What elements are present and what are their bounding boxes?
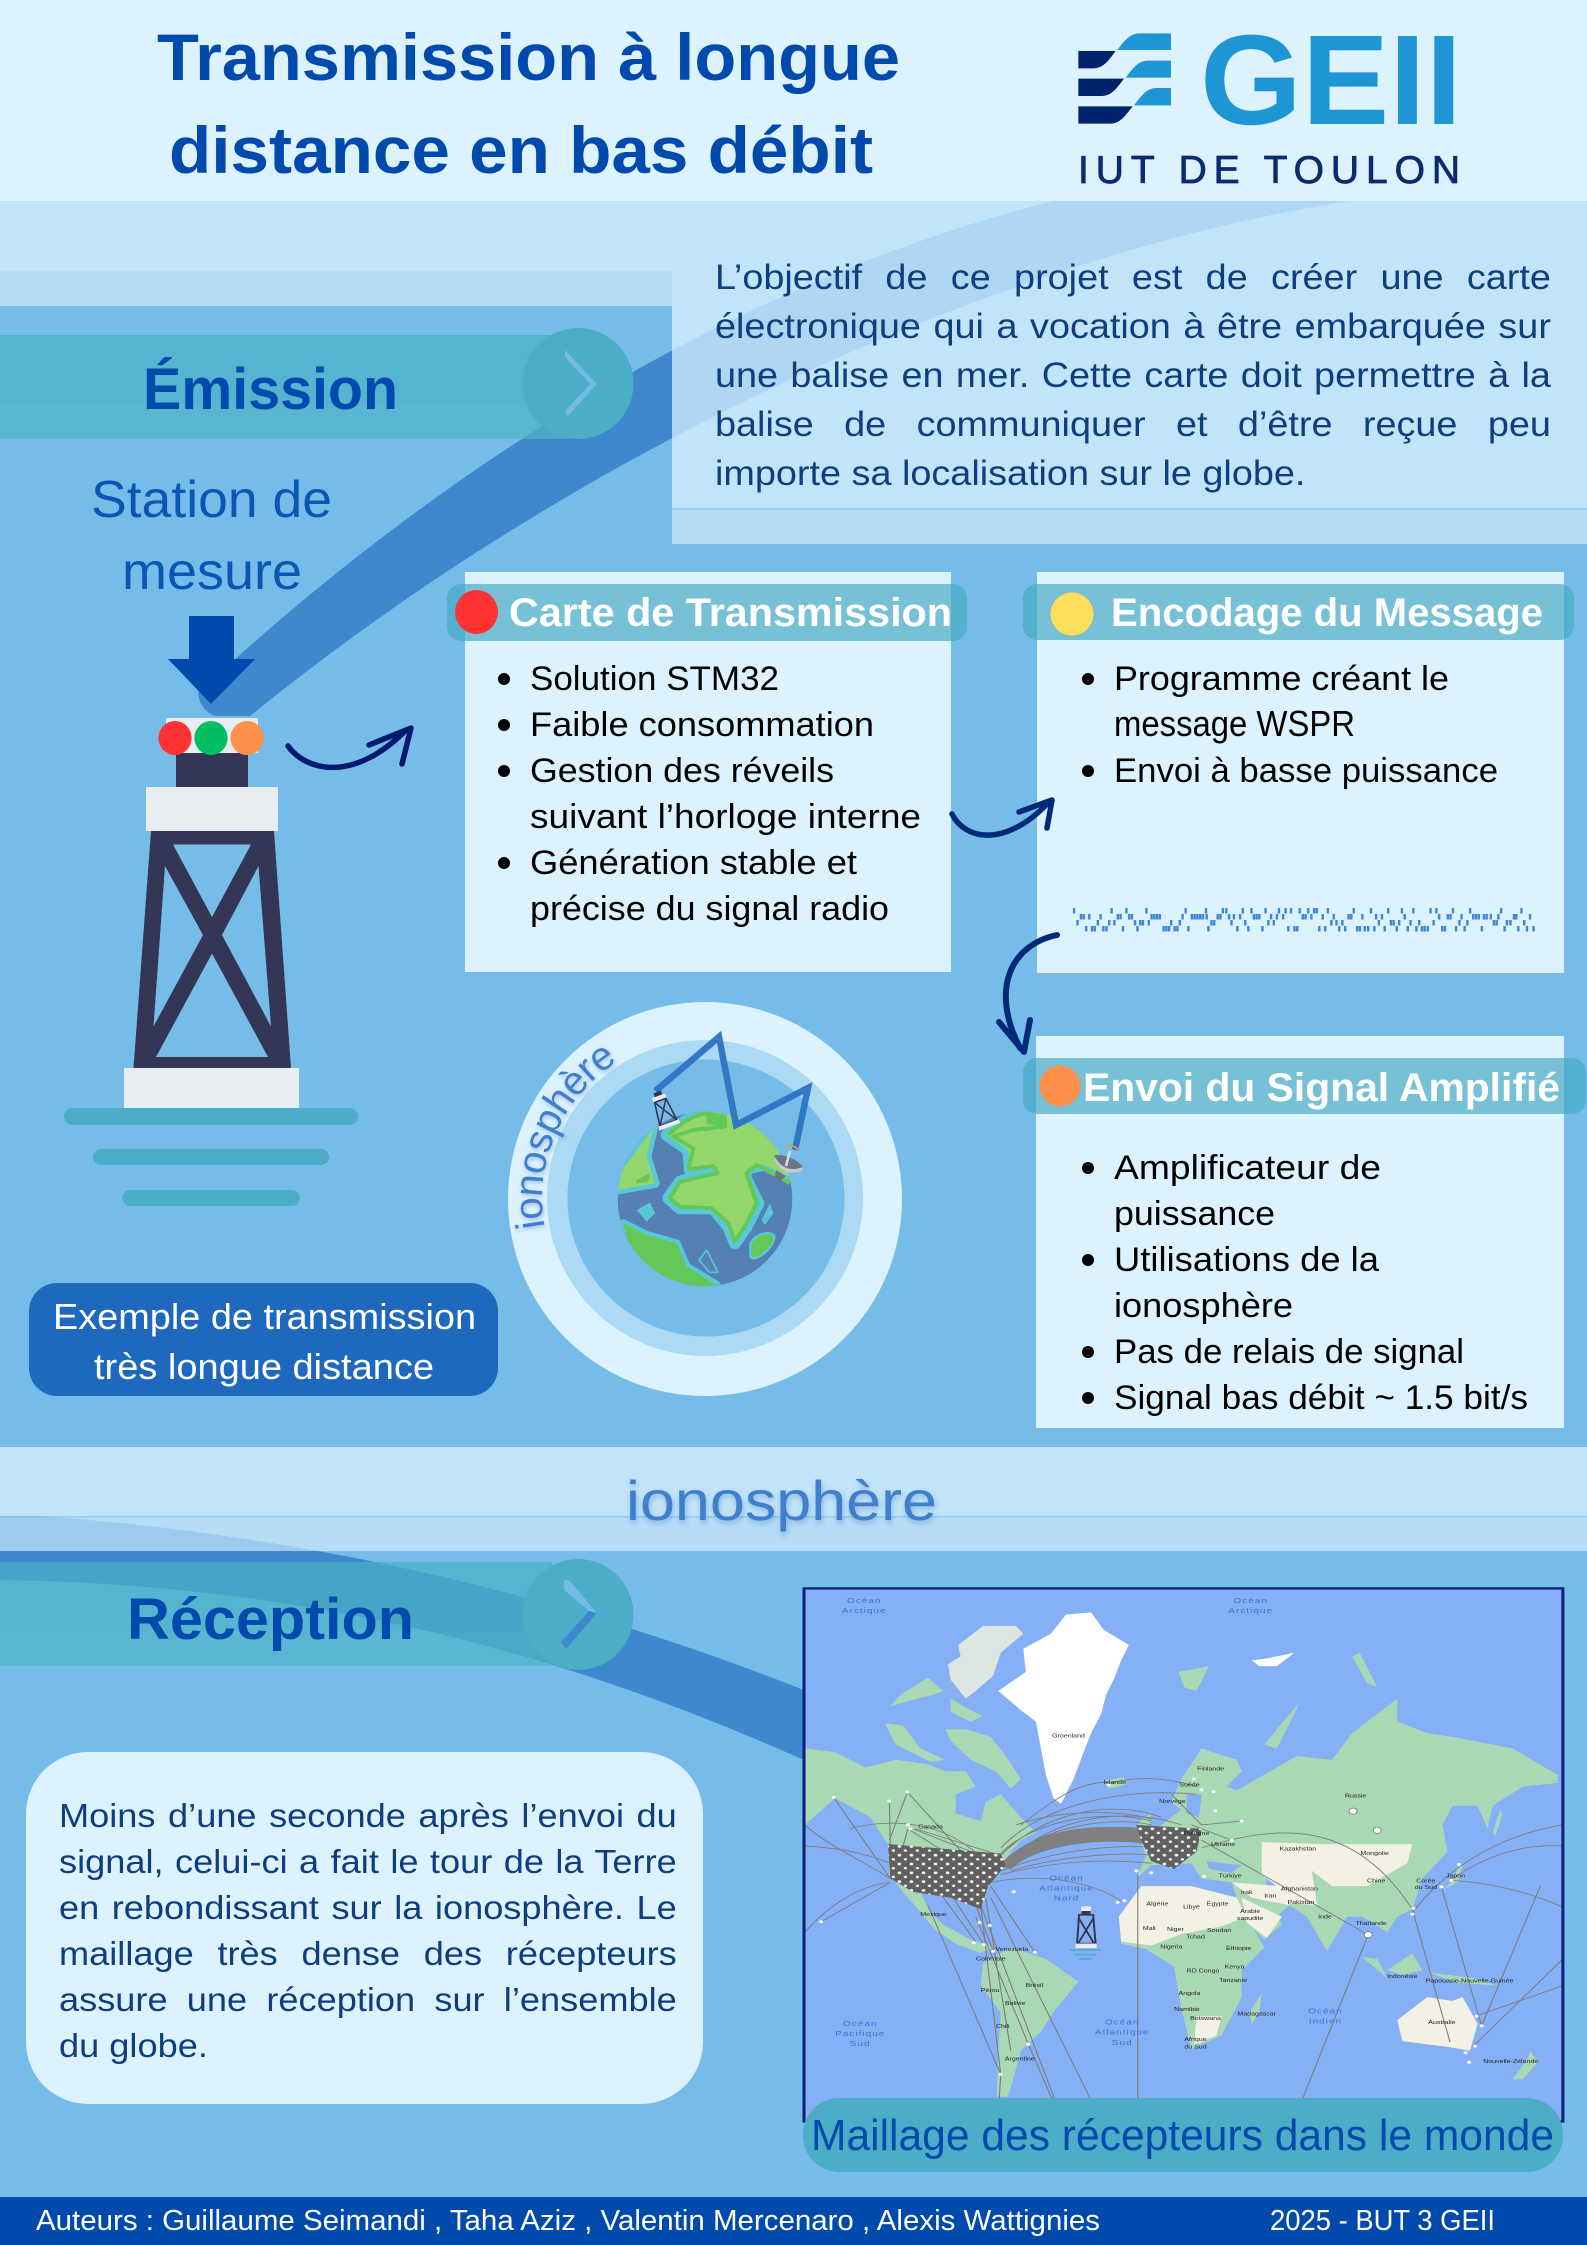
icon: mini buoy bbox=[647, 1088, 680, 1131]
map labels: Brésil bbox=[1026, 1983, 1043, 1989]
world map of receivers bbox=[803, 1588, 1563, 2172]
WSPR signal pattern bbox=[1074, 908, 1534, 932]
world map of receivers: Océan bbox=[847, 1596, 882, 1605]
map labels: Iran bbox=[1264, 1893, 1277, 1899]
bullet list: Faible consommation bbox=[530, 706, 874, 744]
title: distance en bas débit bbox=[169, 113, 873, 187]
world map of receivers: Pacifique bbox=[835, 2029, 885, 2038]
map route lines bbox=[805, 1779, 1563, 2116]
map mini buoy bbox=[1070, 1906, 1101, 1959]
map labels: Madagascar bbox=[1237, 2011, 1276, 2017]
world map of receivers: Nord bbox=[1054, 1894, 1079, 1902]
map labels: Türkiye bbox=[1219, 1873, 1242, 1879]
map ocean bbox=[804, 1588, 1563, 2122]
card header bbox=[1023, 1058, 1586, 1114]
map labels: saoudite bbox=[1237, 1916, 1264, 1922]
map labels: RD Congo bbox=[1187, 1968, 1220, 1974]
heading: ionosphère: ionosphère bbox=[626, 1469, 937, 1532]
title bbox=[157, 20, 900, 187]
map labels: Japon bbox=[1446, 1873, 1466, 1879]
bullet list: Génération stable et bbox=[530, 844, 858, 882]
card title: Envoi du Signal Amplifié bbox=[1083, 1066, 1560, 1110]
map labels: Suède bbox=[1179, 1782, 1200, 1788]
bullet list: précise du signal radio bbox=[530, 890, 889, 928]
bullet list bbox=[498, 660, 921, 928]
arrow: card two to card three bbox=[999, 935, 1057, 1052]
bullet list: Amplificateur de bbox=[1114, 1149, 1381, 1187]
map labels: Chili bbox=[996, 2024, 1010, 2030]
map labels: Thaïlande bbox=[1356, 1921, 1387, 1927]
map labels: Botswana bbox=[1190, 2016, 1222, 2022]
text block: reception explanation: en rebondissant sur la ionosphère. Le bbox=[59, 1890, 677, 1926]
map labels: Indonésie bbox=[1387, 1974, 1418, 1980]
status dot red bbox=[455, 590, 498, 634]
map labels: Égypte bbox=[1207, 1901, 1229, 1907]
label: station de mesure bbox=[91, 471, 332, 601]
card header bbox=[1023, 584, 1574, 640]
map labels: Pakistan bbox=[1287, 1900, 1315, 1906]
caption: exemple de transmission bbox=[29, 1283, 498, 1396]
map labels: Bolivie bbox=[1005, 2001, 1026, 2007]
map labels: Canada bbox=[918, 1824, 943, 1830]
text block: reception explanation: assure une réception sur l’ensemble bbox=[59, 1982, 677, 2018]
wave: reception signal path bbox=[0, 1516, 804, 1760]
diagram: earth and ionosphere bbox=[508, 1002, 902, 1396]
icon: down arrow bbox=[168, 616, 255, 704]
text block: project objective bbox=[715, 258, 1551, 492]
bullet list: Signal bas débit ~ 1.5 bit/s bbox=[1114, 1379, 1528, 1417]
pale upper band bbox=[0, 201, 1587, 544]
wave: emission signal path bbox=[198, 201, 1351, 716]
map water bodies bbox=[1186, 1794, 1277, 1886]
world map of receivers: Océan bbox=[843, 2019, 878, 2028]
map labels: Éthiopie bbox=[1226, 1946, 1252, 1952]
icon: receiver dish bbox=[774, 1146, 803, 1181]
map labels: du Sud bbox=[1184, 2044, 1207, 2050]
map labels: Argentine bbox=[1005, 2056, 1035, 2062]
panel: carte de transmission bbox=[447, 572, 967, 972]
icon: chevron bbox=[561, 1580, 597, 1649]
map labels: Pérou bbox=[981, 1988, 1000, 1994]
world map of receivers: Arctique bbox=[842, 1606, 887, 1615]
status dot yellow bbox=[1050, 592, 1094, 636]
map labels: Tanzanie bbox=[1219, 1978, 1248, 1984]
map labels: Irak bbox=[1241, 1890, 1254, 1896]
map labels: Groenland bbox=[1052, 1733, 1085, 1739]
map labels: Tchad bbox=[1186, 1934, 1205, 1940]
banner circle bbox=[522, 328, 634, 439]
map receiver clusters bbox=[821, 1779, 1482, 2074]
label: station de mesure: mesure bbox=[122, 543, 302, 601]
map labels bbox=[918, 1733, 1539, 2065]
map labels: Algérie bbox=[1146, 1901, 1169, 1907]
text block: reception explanation: maillage très dense des récepteurs bbox=[59, 1936, 677, 1972]
map labels: Namibie bbox=[1174, 2007, 1200, 2013]
pale ionosphere band bbox=[0, 1447, 1587, 1551]
text block: project objective: balise de communiquer et d’être reçue peu bbox=[715, 405, 1551, 444]
wave overlay on ionosphere band bbox=[0, 1516, 317, 1551]
world map of receivers: Sud bbox=[850, 2039, 871, 2048]
map labels: Nouvelle-Zélande bbox=[1483, 2059, 1539, 2065]
logo subtitle: IUT DE TOULON bbox=[1078, 149, 1460, 192]
text block: project objective: une balise en mer. Cette carte doit permettre à la bbox=[715, 356, 1551, 395]
heading: Réception: Réception bbox=[127, 1587, 414, 1652]
bullet list bbox=[1082, 660, 1498, 790]
map labels: Russie bbox=[1345, 1793, 1367, 1799]
globe bbox=[617, 1112, 797, 1290]
authors: Auteurs : Guillaume Seimandi , Taha Aziz , Valentin Mercenaro , Alexis Wattignies bbox=[36, 2205, 1100, 2237]
icon: logo stripes bbox=[1078, 33, 1171, 124]
arrow: buoy to card bbox=[288, 728, 411, 767]
map arctic ice bbox=[948, 1613, 1294, 1804]
world map of receivers: Océan bbox=[1049, 1874, 1084, 1882]
map labels: Afghanistan bbox=[1281, 1886, 1318, 1892]
bullet list: Envoi à basse puissance bbox=[1114, 752, 1498, 790]
text block: reception explanation bbox=[59, 1798, 677, 2064]
text block: project objective: électronique qui a vocation à être embarquée sur bbox=[715, 307, 1551, 346]
bullet list: Utilisations de la bbox=[1114, 1241, 1379, 1279]
map dry regions bbox=[1119, 1842, 1478, 2051]
map land masses bbox=[805, 1653, 1558, 2097]
caption: exemple de transmission: très longue distance bbox=[94, 1346, 434, 1387]
map labels: Ukraine bbox=[1211, 1842, 1236, 1848]
text block: reception explanation: Moins d’une seconde après l’envoi du bbox=[59, 1798, 677, 1834]
bullet list: Pas de relais de signal bbox=[1114, 1333, 1464, 1371]
bullet list: Gestion des réveils bbox=[530, 752, 834, 790]
section banner: émission bbox=[0, 328, 634, 439]
map labels: Corée bbox=[1416, 1878, 1436, 1884]
world map of receivers: Arctique bbox=[1228, 1606, 1273, 1615]
banner circle bbox=[522, 1559, 634, 1670]
map caption bbox=[803, 2098, 1563, 2172]
date and class: 2025 - BUT 3 GEII bbox=[1270, 2205, 1495, 2237]
world map of receivers: Sud bbox=[1112, 2038, 1133, 2047]
map labels: Angola bbox=[1179, 1991, 1201, 1997]
card header bbox=[447, 584, 967, 641]
text block: reception explanation: signal, celui-ci a fait le tour de la Terre bbox=[59, 1844, 677, 1880]
panel: reception text background bbox=[26, 1752, 703, 2104]
icon: chevron bbox=[565, 350, 597, 417]
footer bbox=[0, 2197, 1587, 2245]
logo word GEII: GEII bbox=[1200, 9, 1462, 152]
caption: exemple de transmission: Exemple de transmission bbox=[53, 1296, 476, 1337]
arrow: card one to card two bbox=[952, 800, 1052, 835]
map labels: Venezuela bbox=[995, 1947, 1029, 1953]
bullet list: Programme créant le bbox=[1114, 660, 1449, 698]
map labels: Afrique bbox=[1184, 2037, 1207, 2043]
label: station de mesure: Station de bbox=[91, 471, 332, 529]
map labels: Kenya bbox=[1225, 1964, 1245, 1970]
world map of receivers: Océan bbox=[1233, 1596, 1268, 1605]
curved label: ionosphère: ionosphère bbox=[514, 1048, 616, 1232]
map labels: Finlande bbox=[1197, 1766, 1225, 1772]
logo GEII IUT de Toulon bbox=[1078, 9, 1462, 192]
status dot orange bbox=[1040, 1066, 1080, 1106]
header band bbox=[0, 0, 1587, 201]
card title: Carte de Transmission bbox=[509, 591, 952, 635]
world map of receivers: Atlantique bbox=[1039, 1884, 1094, 1892]
world map of receivers: Atlantique bbox=[1095, 2028, 1150, 2036]
map frame bbox=[804, 1588, 1563, 2122]
map labels: Pologne bbox=[1184, 1831, 1210, 1837]
map labels: Australie bbox=[1428, 2020, 1456, 2026]
map labels: Arabie bbox=[1240, 1909, 1261, 1915]
world map of receivers: Indien bbox=[1309, 2017, 1342, 2025]
title: Transmission à longue bbox=[157, 20, 900, 94]
bullet list bbox=[1082, 1149, 1528, 1417]
map labels: Inde bbox=[1318, 1914, 1332, 1920]
map caption: Maillage des récepteurs dans le monde bbox=[811, 2111, 1554, 2160]
world map of receivers: Océan bbox=[1105, 2017, 1139, 2026]
bullet list: message WSPR bbox=[1114, 703, 1355, 744]
map labels: Papouasie-Nouvelle-Guinée bbox=[1426, 1978, 1514, 1984]
bullet list: suivant l’horloge interne bbox=[530, 798, 921, 836]
ionosphere rings bbox=[508, 1002, 902, 1396]
map labels: Colombie bbox=[976, 1956, 1006, 1962]
map labels: Mexique bbox=[920, 1912, 947, 1918]
map labels: Kazakhstan bbox=[1280, 1846, 1317, 1852]
map labels: Mali bbox=[1143, 1926, 1156, 1932]
map labels: Libye bbox=[1183, 1904, 1200, 1910]
heading: Émission: Émission bbox=[143, 357, 398, 422]
bullet list: puissance bbox=[1114, 1195, 1275, 1233]
text block: project objective: importe sa localisation sur le globe. bbox=[715, 454, 1305, 492]
icon: buoy station bbox=[64, 718, 358, 1206]
wave overlay on objective panel bbox=[672, 201, 1350, 438]
map labels: du Sud bbox=[1415, 1885, 1438, 1891]
text block: reception explanation: du globe. bbox=[59, 2028, 208, 2064]
map labels: Norvège bbox=[1159, 1799, 1186, 1805]
section banner: réception bbox=[0, 1559, 634, 1670]
text block: project objective: L’objectif de ce projet est de créer une carte bbox=[715, 258, 1551, 296]
panel: envoi du signal amplifié bbox=[1023, 1036, 1586, 1428]
map labels: Soudan bbox=[1207, 1928, 1232, 1934]
map labels: Nigeria bbox=[1160, 1944, 1183, 1950]
panel: encodage du message bbox=[1023, 572, 1574, 973]
map labels: Niger bbox=[1167, 1927, 1184, 1933]
map labels: Mongolie bbox=[1360, 1851, 1389, 1857]
card title: Encodage du Message bbox=[1111, 591, 1543, 635]
map labels: Chine bbox=[1367, 1878, 1386, 1884]
map labels: Islande bbox=[1103, 1780, 1127, 1786]
bullet list: Solution STM32 bbox=[530, 660, 779, 698]
bullet list: ionosphère bbox=[1114, 1287, 1293, 1325]
signal zigzag bbox=[656, 1037, 808, 1150]
world map of receivers: Océan bbox=[1308, 2007, 1343, 2015]
